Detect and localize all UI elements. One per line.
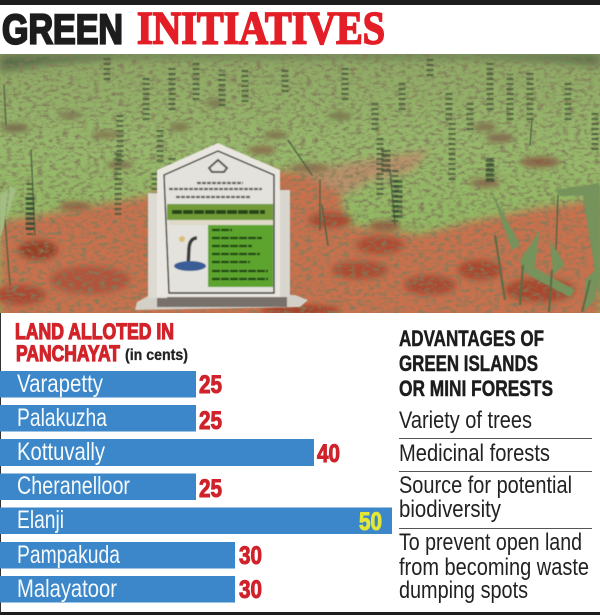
advantages heading: ADVANTAGES OF bbox=[399, 326, 544, 351]
chart heading: land alloted: LAND ALLOTED IN bbox=[15, 319, 174, 344]
bar: Pampakuda 30 bbox=[0, 541, 262, 570]
title: GREEN bbox=[2, 6, 123, 52]
bar: Cheranelloor 25: 25 bbox=[199, 475, 222, 503]
bar: Malayatoor 30: 30 bbox=[239, 576, 262, 604]
bar: Kottuvally 40: 40 bbox=[317, 440, 340, 468]
item: prevent waste dumping bbox=[399, 529, 589, 604]
advantages heading: GREEN ISLANDS bbox=[399, 351, 538, 376]
bar: Kottuvally 40 bbox=[0, 438, 340, 468]
bar: Varapetty 25 bbox=[0, 370, 222, 399]
saplings bbox=[4, 58, 595, 285]
bar: Malayatoor 30 bbox=[0, 575, 262, 604]
bar: Pampakuda 30: 30 bbox=[239, 542, 262, 570]
bar: Elanji 50 bbox=[0, 506, 392, 536]
left frame edge bbox=[0, 313, 1, 613]
bar: Malayatoor 30: Malayatoor bbox=[17, 575, 117, 603]
advantages list bbox=[399, 407, 592, 604]
bar: Kottuvally 40: Kottuvally bbox=[17, 438, 105, 466]
item: variety of trees: Variety of trees bbox=[399, 407, 532, 434]
photo: sapling plantation with sign bbox=[0, 54, 600, 320]
item: source for potential biodiversity: biodiversity bbox=[399, 496, 501, 523]
title: INITIATIVES bbox=[137, 2, 385, 54]
bar: Elanji 50: Elanji bbox=[17, 506, 64, 534]
grass and soil ground bbox=[0, 54, 600, 320]
title bbox=[2, 2, 385, 54]
bar: Cheranelloor 25 bbox=[0, 472, 222, 503]
sign bbox=[135, 143, 308, 310]
foreground plants bbox=[0, 183, 600, 312]
sign logo bbox=[188, 238, 197, 268]
advantages heading bbox=[399, 326, 553, 401]
top frame bar bbox=[0, 0, 600, 5]
bottom frame bar bbox=[0, 612, 600, 615]
chart heading: land alloted bbox=[15, 319, 188, 366]
bar: Elanji 50: 50 bbox=[359, 508, 382, 536]
bar chart: land per panchayat bbox=[0, 370, 392, 604]
bar: Palakuzha 25 bbox=[0, 404, 222, 435]
chart heading: land alloted: (in cents) bbox=[125, 347, 188, 364]
bar: Palakuzha 25: 25 bbox=[199, 407, 222, 435]
sign emblem bbox=[209, 160, 227, 172]
item: prevent waste dumping: dumping spots bbox=[399, 577, 528, 604]
bar: Pampakuda 30: Pampakuda bbox=[17, 541, 120, 569]
bar: Varapetty 25: Varapetty bbox=[17, 370, 103, 398]
item: medicinal forests: Medicinal forests bbox=[399, 440, 550, 467]
item: source for potential biodiversity bbox=[399, 472, 572, 523]
chart heading: land alloted: PANCHAYAT bbox=[16, 341, 120, 366]
bar: Cheranelloor 25: Cheranelloor bbox=[17, 472, 130, 500]
sign lettering strokes bbox=[169, 183, 262, 197]
advantages heading: OR MINI FORESTS bbox=[399, 376, 553, 401]
bar: Varapetty 25: 25 bbox=[199, 371, 222, 399]
bar: Palakuzha 25: Palakuzha bbox=[17, 404, 107, 432]
